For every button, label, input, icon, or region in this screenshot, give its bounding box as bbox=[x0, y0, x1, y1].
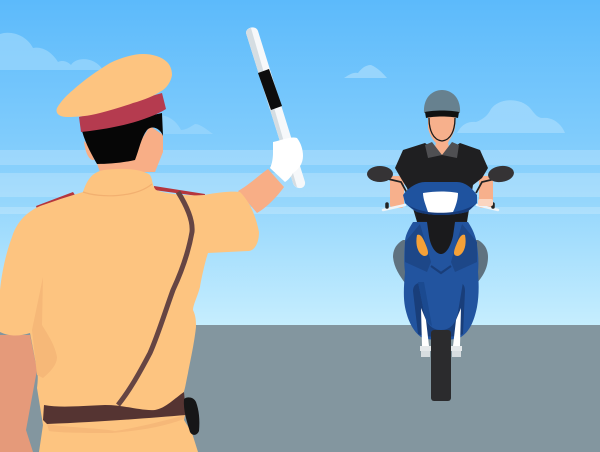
hair bbox=[82, 113, 163, 164]
shoulder strap bbox=[118, 192, 192, 405]
fender shade bbox=[418, 282, 432, 326]
epaulette left bbox=[36, 192, 75, 209]
handlebars bbox=[383, 204, 498, 210]
officer raised forearm bbox=[238, 169, 284, 213]
front chevron bbox=[431, 266, 451, 273]
officer neck bbox=[92, 126, 163, 172]
horizon haze bands bbox=[0, 150, 600, 214]
front wheel bbox=[431, 330, 451, 401]
belt bbox=[43, 392, 186, 424]
ear bbox=[84, 141, 94, 160]
helmet bbox=[424, 90, 460, 118]
rider collar bbox=[425, 142, 459, 158]
baton bbox=[246, 27, 305, 188]
rider neck and face bbox=[428, 112, 456, 156]
cap top bbox=[56, 54, 172, 117]
police officer bbox=[0, 27, 305, 452]
rider arms bbox=[390, 176, 493, 208]
cap band bbox=[79, 93, 166, 132]
uniform shirt bbox=[0, 169, 259, 452]
shirt side shadow bbox=[32, 277, 57, 378]
cloud: top left bbox=[0, 33, 103, 70]
side panels behind scooter bbox=[393, 240, 488, 283]
headlight bbox=[423, 192, 458, 213]
central black panel bbox=[426, 215, 456, 254]
holster bbox=[184, 397, 199, 435]
black band under cowl bbox=[417, 208, 467, 221]
epaulette right bbox=[154, 186, 205, 197]
wheel arch bbox=[413, 283, 465, 337]
scooter body shadow panels bbox=[405, 224, 477, 272]
cloud: small middle bbox=[344, 65, 387, 78]
white glove bbox=[270, 138, 303, 182]
scooter handlebar cowl bbox=[403, 182, 477, 215]
left mirror bbox=[367, 166, 393, 182]
right mirror bbox=[487, 164, 515, 184]
cloud: behind officer head bbox=[160, 115, 213, 134]
sky background bbox=[0, 0, 600, 326]
orange indicators bbox=[416, 235, 466, 256]
collar fold line bbox=[83, 184, 152, 196]
waist shadow bbox=[47, 415, 185, 433]
front forks bbox=[420, 308, 462, 357]
motorcycle rider bbox=[367, 90, 515, 401]
road bbox=[0, 325, 600, 452]
left arm bbox=[0, 335, 37, 452]
rider chin strap bbox=[429, 118, 455, 141]
scooter body bbox=[404, 222, 479, 340]
cloud: right of rider bbox=[457, 100, 565, 133]
mirror stems bbox=[384, 178, 499, 193]
cowl dark trim bbox=[405, 203, 477, 215]
gloved hand right bbox=[478, 199, 493, 206]
rider black shirt bbox=[395, 143, 488, 222]
front fender bbox=[418, 282, 463, 330]
